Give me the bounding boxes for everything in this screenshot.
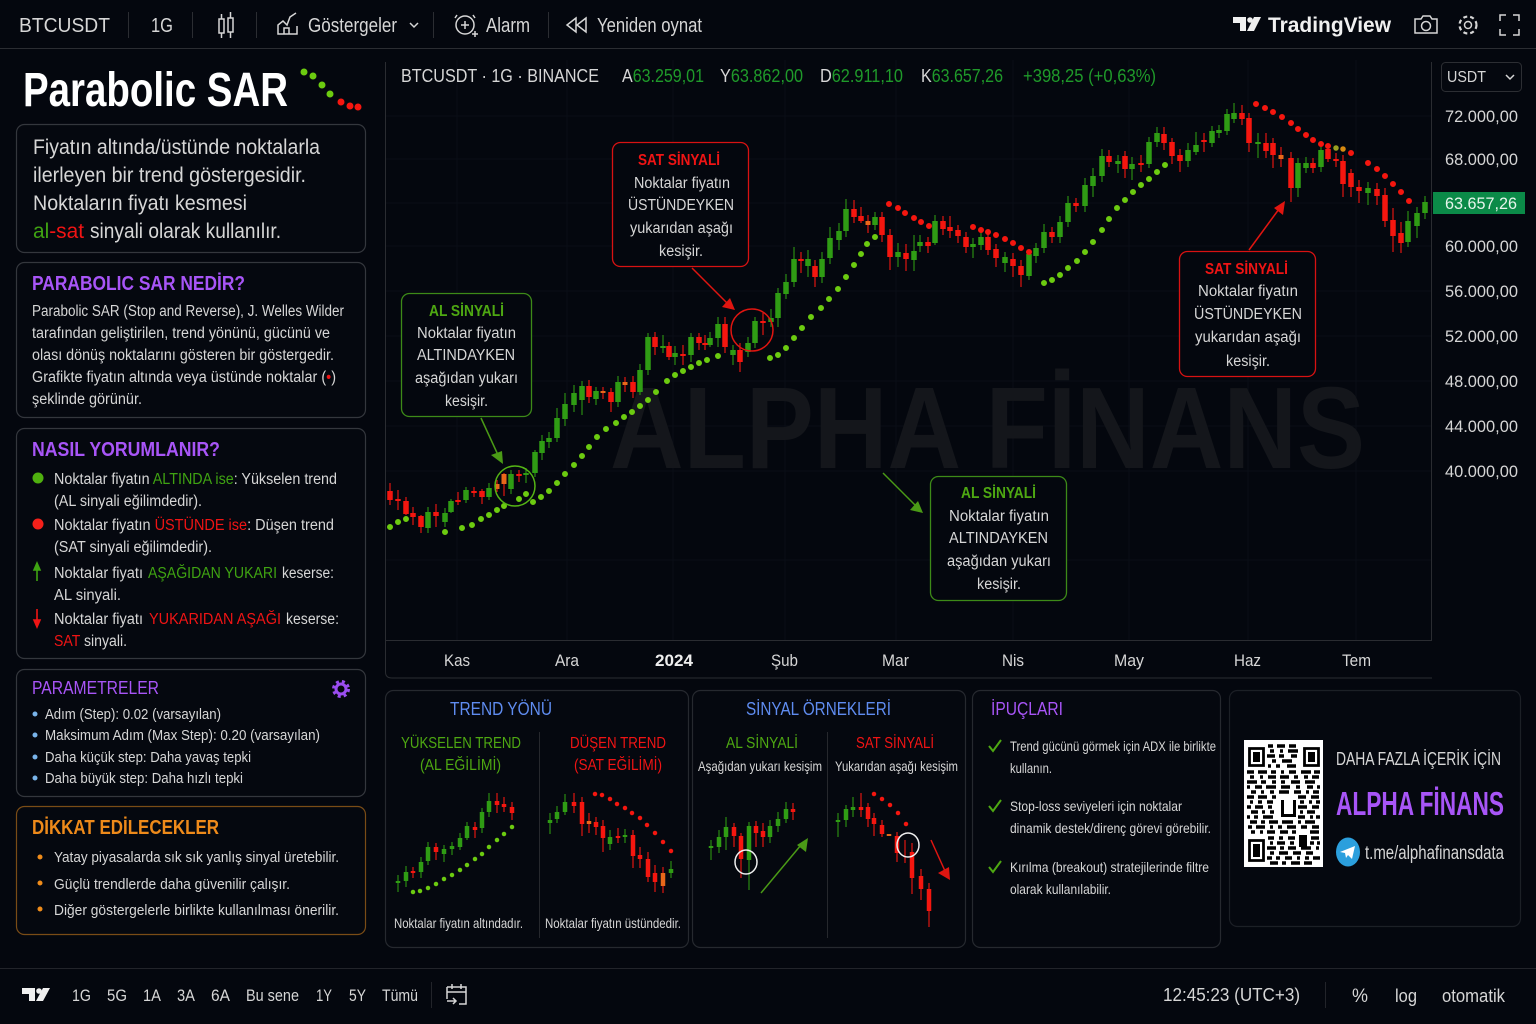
callout: sell signal 1: Noktalar fiyatın xyxy=(634,175,730,192)
panel: how to interpret: keserse: xyxy=(286,611,339,628)
panel: parameters: Adım (Step): 0.02 (varsayılan) xyxy=(45,707,221,723)
panel: what is parabolic sar xyxy=(16,262,366,418)
icon: calendar xyxy=(447,984,466,1004)
callout: buy signal 1: Noktalar fiyatın xyxy=(417,325,516,342)
panel: what is parabolic sar: tarafından geliştirilen, trend yönünü, gücünü ve xyxy=(32,325,330,342)
time axis: Şub xyxy=(771,651,798,670)
icon: indicators xyxy=(278,13,297,34)
parabolic sar dots xyxy=(390,104,1409,532)
panel: what is parabolic sar: şeklinde görünür. xyxy=(32,391,142,408)
panel: cautions: Yatay piyasalarda sık sık yanlış sinyal üretebilir. xyxy=(54,849,339,866)
panel: tips: Stop-loss seviyeleri için noktalar xyxy=(1010,798,1182,814)
bottom toolbar: otomatik xyxy=(1442,986,1506,1006)
top toolbar: Yeniden oynat xyxy=(597,15,702,37)
panel: trend direction: TREND YÖNÜ xyxy=(450,699,552,719)
panel: signal examples: Yukarıdan aşağı kesişim xyxy=(835,758,958,774)
chart: uptrend xyxy=(398,793,512,892)
callout: sell signal 1: SAT SİNYALİ xyxy=(638,152,720,169)
bottom toolbar: 5Y xyxy=(349,986,366,1005)
panel: tips xyxy=(972,690,1220,948)
panel: how to interpret: keserse: xyxy=(282,565,334,582)
callout: sell signal 2 xyxy=(1180,252,1316,376)
time axis: Tem xyxy=(1342,651,1371,670)
bottom toolbar: 6A xyxy=(211,986,231,1005)
chart: downtrend xyxy=(550,793,671,893)
panel: intro: Fiyatın altında/üstünde noktalarla xyxy=(33,136,320,159)
top toolbar: TradingView xyxy=(1268,14,1392,37)
time axis: Haz xyxy=(1234,651,1261,670)
price axis: 44.000,00 xyxy=(1445,417,1518,436)
panel: how to interpret: (SAT sinyali eğilimdedir). xyxy=(54,539,212,556)
price axis: 68.000,00 xyxy=(1445,150,1518,169)
panel: how to interpret: YUKARIDAN AŞAĞI xyxy=(149,611,281,628)
callout: sell signal 1: ÜSTÜNDEYKEN xyxy=(628,196,734,214)
top toolbar: Göstergeler xyxy=(308,15,397,37)
panel: how to interpret: SAT sinyali. xyxy=(54,633,127,650)
callout: sell signal 2: ÜSTÜNDEYKEN xyxy=(1194,305,1302,323)
panel: cautions: DİKKAT EDİLECEKLER xyxy=(32,816,219,839)
top toolbar xyxy=(0,12,1536,48)
icon: up arrow xyxy=(34,563,40,581)
panel: trend direction xyxy=(386,690,688,948)
panel: trend direction: Noktalar fiyatın üstündedir. xyxy=(545,915,681,931)
price axis: 40.000,00 xyxy=(1445,462,1518,481)
icon: gear xyxy=(334,682,348,696)
panel: intro: Noktaların fiyatı kesmesi xyxy=(33,192,247,215)
price axis: 56.000,00 xyxy=(1445,282,1518,301)
callout: sell signal 1 xyxy=(612,142,748,266)
title: Parabolic SAR xyxy=(23,64,288,117)
panel: what is parabolic sar: PARABOLIC SAR NEDİR? xyxy=(32,272,245,295)
panel: cautions: Güçlü trendlerde daha güvenilir çalışır. xyxy=(54,876,290,893)
callout: buy signal 2: aşağıdan yukarı xyxy=(947,553,1051,570)
arrow: sell signal 2 xyxy=(1249,201,1285,250)
watermark: ALPHA FİNANS xyxy=(610,363,1365,493)
price axis: 72.000,00 xyxy=(1445,107,1518,126)
callout: buy signal 2: kesişir. xyxy=(977,576,1021,593)
price axis: 60.000,00 xyxy=(1445,237,1518,256)
price axis xyxy=(1433,107,1525,481)
panel: tips: Kırılma (breakout) stratejilerinde filtre xyxy=(1010,859,1209,875)
time axis: Nis xyxy=(1002,651,1024,670)
arrow: buy signal 2 xyxy=(883,473,923,513)
bottom toolbar: 1A xyxy=(143,986,162,1005)
icon: alarm xyxy=(455,15,478,37)
panel: what is parabolic sar: Grafikte fiyatın altında veya üstünde noktalar (•) xyxy=(32,369,336,386)
time axis: Mar xyxy=(882,651,909,670)
callout: buy signal 1: aşağıdan yukarı xyxy=(415,370,518,387)
panel: tips: Trend gücünü görmek için ADX ile birlikte xyxy=(1010,738,1216,754)
bottom toolbar: Bu sene xyxy=(246,986,299,1005)
currency dropdown: USDT xyxy=(1447,69,1486,86)
bottom toolbar: 5G xyxy=(107,986,127,1005)
icon: fullscreen xyxy=(1500,15,1519,35)
chart legend: Y63.862,00 xyxy=(720,66,803,86)
panel: intro: al-sat xyxy=(33,220,84,243)
panel: tips: İPUÇLARI xyxy=(991,699,1063,719)
QR code xyxy=(1244,740,1323,867)
logo: TradingView xyxy=(1233,17,1261,31)
icon: telegram xyxy=(1336,838,1360,866)
panel: trend direction: Noktalar fiyatın altındadır. xyxy=(394,915,523,931)
callout: buy signal 1 xyxy=(402,294,532,416)
icon: camera xyxy=(1415,16,1437,33)
currency dropdown xyxy=(1442,62,1522,92)
callout: buy signal 2: Noktalar fiyatın xyxy=(949,508,1049,525)
panel: how to interpret: Noktalar fiyatı xyxy=(54,565,143,582)
panel: signal examples: AL SİNYALİ xyxy=(726,733,798,752)
panel: trend direction: DÜŞEN TREND xyxy=(570,734,666,752)
panel: signal examples: SİNYAL ÖRNEKLERİ xyxy=(746,699,891,719)
icon: replay xyxy=(567,18,586,32)
bottom toolbar: Tümü xyxy=(382,986,418,1005)
arrowhead: buy signal 1 xyxy=(491,451,503,464)
current price tag: 63.657,26 xyxy=(1445,194,1517,213)
panel: parameters: Daha büyük step: Daha hızlı tepki xyxy=(45,771,243,787)
time axis: Kas xyxy=(444,651,470,670)
top toolbar: Alarm xyxy=(486,15,530,37)
panel: signal examples xyxy=(692,690,966,948)
panel: parameters: PARAMETRELER xyxy=(32,678,159,698)
panel: trend direction: (AL EĞİLİMİ) xyxy=(420,755,501,774)
panel: parameters xyxy=(16,670,366,796)
panel: tips: kullanın. xyxy=(1010,760,1052,776)
time axis: Ara xyxy=(555,651,579,670)
bottom toolbar: 12:45:23 (UTC+3) xyxy=(1163,985,1300,1005)
bottom toolbar: 1G xyxy=(72,986,91,1005)
panel: how to interpret: Noktalar fiyatı xyxy=(54,611,143,628)
candlestick chart xyxy=(390,103,1425,533)
callout: buy signal 1: kesişir. xyxy=(445,393,488,410)
chart frame and grid xyxy=(385,60,1432,678)
icon: candles xyxy=(219,12,233,38)
top toolbar: 1G xyxy=(151,15,173,37)
bottom toolbar: log xyxy=(1395,986,1417,1006)
panel: how to interpret: Noktalar fiyatın ALTINDA ise: Yükselen trend xyxy=(54,471,337,488)
panel: tips: olarak kullanılabilir. xyxy=(1010,881,1111,897)
panel: intro: ilerleyen bir trend göstergesidir. xyxy=(33,164,306,187)
icon: title dots xyxy=(304,72,358,107)
callout: buy signal 1: AL SİNYALİ xyxy=(429,303,504,320)
icon: chevron xyxy=(410,23,418,27)
chart legend: K63.657,26 xyxy=(921,66,1003,86)
chart legend: D62.911,10 xyxy=(820,66,903,86)
icon: down arrow xyxy=(34,609,40,627)
chart: sell example xyxy=(838,793,950,927)
panel: how to interpret: Noktalar fiyatın ÜSTÜNDE ise: Düşen trend xyxy=(54,516,334,534)
panel: how to interpret xyxy=(16,428,366,658)
callout: buy signal 1: ALTINDAYKEN xyxy=(417,347,515,364)
bottom toolbar: 1Y xyxy=(316,986,332,1005)
callout: sell signal 2: yukarıdan aşağı xyxy=(1195,329,1301,346)
panel: parameters: Daha küçük step: Daha yavaş tepki xyxy=(45,750,251,766)
panel: tips: dinamik destek/direnç görevi görebilir. xyxy=(1010,820,1211,836)
circle: buy crossover xyxy=(495,466,535,506)
circle: sell crossover xyxy=(731,309,773,351)
time axis: May xyxy=(1114,651,1144,670)
icon: settings xyxy=(1460,16,1476,34)
panel: how to interpret: (AL sinyali eğilimdedir). xyxy=(54,493,202,510)
panel: how to interpret: AL sinyali. xyxy=(54,587,121,604)
callout: sell signal 1: kesişir. xyxy=(659,243,703,260)
price axis: 48.000,00 xyxy=(1445,372,1518,391)
panel: what is parabolic sar: Parabolic SAR (Stop and Reverse), J. Welles Wilder xyxy=(32,303,344,320)
panel: intro: sinyali olarak kullanılır. xyxy=(90,220,281,243)
panel: parameters: Maksimum Adım (Max Step): 0.20 (varsayılan) xyxy=(45,728,320,744)
callout: sell signal 2: Noktalar fiyatın xyxy=(1198,283,1298,300)
bottom toolbar: 3A xyxy=(177,986,196,1005)
callout: sell signal 2: SAT SİNYALİ xyxy=(1205,261,1288,278)
price axis: 52.000,00 xyxy=(1445,327,1518,346)
chart legend xyxy=(401,66,1156,86)
panel: cautions: Diğer göstergelerle birlikte kullanılması önerilir. xyxy=(54,902,339,919)
bottom toolbar xyxy=(0,968,1536,1008)
panel: what is parabolic sar: olası dönüş noktalarını gösteren bir göstergedir. xyxy=(32,347,334,364)
panel: signal examples: Aşağıdan yukarı kesişim xyxy=(698,758,822,774)
time axis xyxy=(444,651,1371,670)
callout: buy signal 2: AL SİNYALİ xyxy=(961,485,1036,502)
panel: signal examples: SAT SİNYALİ xyxy=(856,733,934,752)
top toolbar: BTCUSDT xyxy=(19,15,110,37)
panel: promo xyxy=(1230,690,1520,926)
panel: how to interpret: AŞAĞIDAN YUKARI xyxy=(148,565,277,582)
chart: buy example xyxy=(711,802,808,893)
callout: buy signal 2: ALTINDAYKEN xyxy=(949,530,1048,547)
panel: intro xyxy=(16,124,366,252)
arrow: buy signal 1 xyxy=(481,418,498,455)
panel: trend direction: (SAT EĞİLİMİ) xyxy=(574,755,662,774)
panel: how to interpret: NASIL YORUMLANIR? xyxy=(32,439,220,461)
chart legend: +398,25 (+0,63%) xyxy=(1023,66,1156,86)
time axis: 2024 xyxy=(655,651,694,670)
arrow: sell signal 1 xyxy=(692,268,735,310)
chart legend: BTCUSDT · 1G · BINANCE xyxy=(401,66,599,86)
callout: sell signal 1: yukarıdan aşağı xyxy=(630,220,733,237)
panel: trend direction: YÜKSELEN TREND xyxy=(401,734,521,752)
bottom toolbar: % xyxy=(1352,986,1368,1007)
callout: buy signal 2 xyxy=(930,476,1066,600)
callout: sell signal 2: kesişir. xyxy=(1226,353,1270,370)
logo: TradingView mark xyxy=(22,988,50,1001)
panel: cautions xyxy=(16,806,366,934)
chart legend: A63.259,01 xyxy=(622,66,704,86)
